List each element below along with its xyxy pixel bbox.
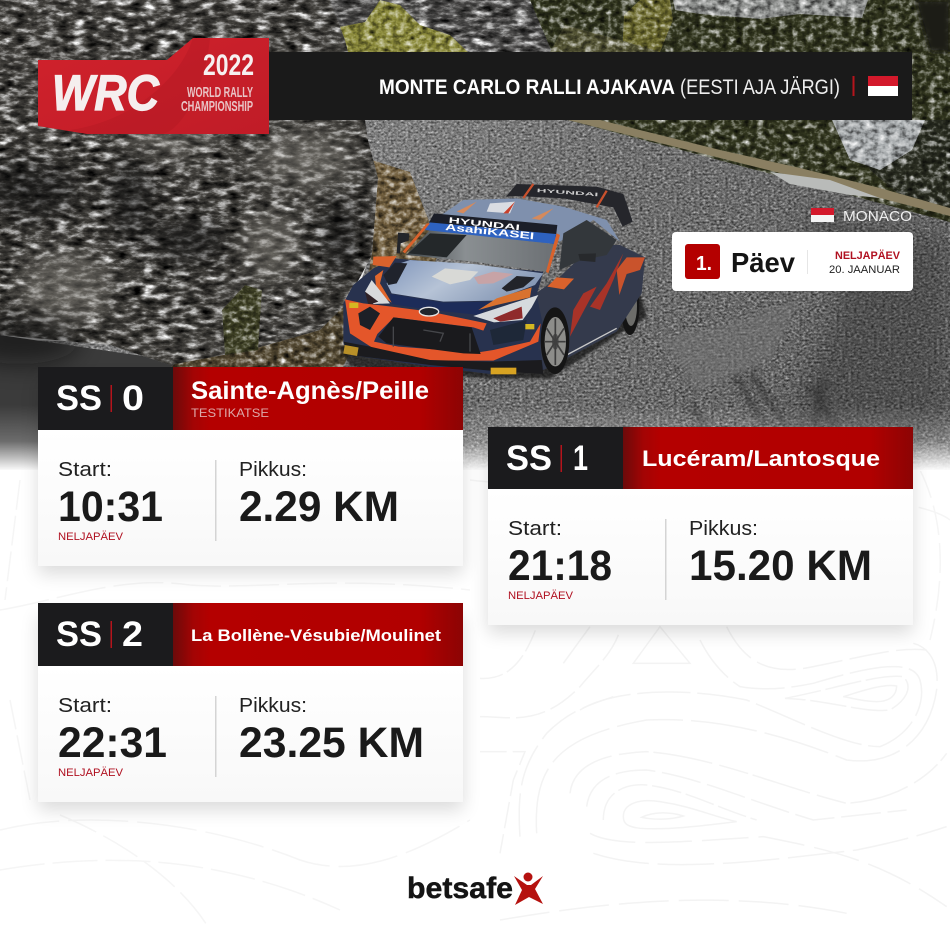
left bonnet vent — [383, 263, 407, 285]
icon: Monaco flag small — [811, 208, 834, 222]
rally car: AsahiKASEI — [445, 222, 535, 242]
photo: moss on rock — [222, 285, 262, 355]
roof — [433, 198, 620, 242]
weekday: NELJAPÄEV — [835, 249, 901, 262]
stage length: Pikkus: — [239, 459, 307, 481]
windscreen banner — [425, 213, 557, 244]
windscreen banner text: HYUNDAI — [448, 216, 520, 232]
stage number — [506, 439, 588, 478]
stage length: Pikkus: — [239, 695, 307, 717]
icon: Monaco flag — [868, 76, 898, 96]
photo: rock wall — [0, 0, 378, 365]
start time: NELJAPÄEV — [58, 531, 124, 543]
front body — [343, 258, 543, 374]
windscreen — [406, 230, 554, 272]
WRC logo: CHAMPIONSHIP — [181, 98, 253, 115]
photo: grass below rock — [170, 290, 352, 372]
stage number: SS — [56, 379, 102, 418]
start time — [508, 518, 612, 602]
background photo: mountain road — [0, 0, 950, 471]
stage number: 1 — [573, 439, 588, 478]
stage length: 23.25 KM — [239, 719, 424, 767]
photo: dark road right — [780, 210, 950, 440]
stage length: 15.20 KM — [689, 542, 872, 590]
stage number: 2 — [122, 615, 143, 654]
day badge — [672, 232, 913, 291]
logo year: 2022 — [203, 49, 254, 82]
logo shape — [38, 38, 269, 134]
photo: olive tree — [323, 0, 468, 56]
date: 20. JAANUAR — [829, 264, 900, 276]
bonnet vent — [502, 276, 535, 292]
stage length: 2.29 KM — [239, 483, 399, 531]
bonnet band — [390, 294, 493, 315]
start time — [58, 695, 167, 779]
icon: betsafe figure — [514, 872, 543, 905]
splitter — [343, 342, 543, 374]
stage name: Sainte-Agnès/Peille — [191, 377, 429, 405]
mirror left — [397, 233, 409, 253]
orange swoosh — [478, 287, 532, 310]
bonnet sticker — [432, 268, 478, 284]
day label: Päev — [731, 247, 795, 278]
location label — [811, 208, 912, 225]
stage length — [239, 459, 399, 531]
mirror right — [578, 253, 596, 262]
rear wing — [506, 184, 633, 227]
betsafe logo: betsafe — [407, 872, 513, 905]
stage number: SS — [506, 439, 552, 478]
start time: 22:31 — [58, 719, 167, 767]
stage number: SS — [56, 615, 102, 654]
front badge — [419, 307, 439, 316]
start time: Start: — [508, 518, 562, 540]
photo: forest backdrop — [300, 0, 950, 230]
photo: road light patch — [660, 300, 800, 390]
photo: scrub — [550, 25, 660, 52]
stage number — [56, 615, 143, 654]
wing text: HYUNDAI — [537, 188, 600, 198]
start time: Start: — [58, 695, 112, 717]
fog lights — [349, 303, 358, 308]
photo: dark rock upper middle — [300, 0, 552, 52]
photo: rock dark patches — [0, 158, 360, 364]
stage number — [56, 379, 144, 418]
day number — [685, 244, 720, 279]
photo: dark branch top right — [915, 0, 950, 52]
stage name: La Bollène-Vésubie/Moulinet — [191, 626, 441, 645]
photo: snowy cliff — [673, 0, 868, 19]
rear wheel — [621, 275, 639, 335]
logo subtitle: WORLD RALLY — [187, 84, 253, 101]
stage length: Pikkus: — [689, 518, 758, 540]
photo: roadside verge — [560, 118, 950, 216]
front wheel — [541, 307, 569, 374]
photo: road left dark — [0, 335, 360, 470]
title: MONTE CARLO RALLI AJAKAVA — [379, 76, 675, 99]
bonnet — [387, 260, 543, 302]
start time — [58, 459, 163, 543]
start time: NELJAPÄEV — [58, 767, 124, 779]
topographic background pattern — [480, 627, 947, 920]
photo: snow on verge — [770, 172, 880, 198]
panel: SS 1 — [488, 427, 913, 633]
stage number: 0 — [122, 379, 144, 418]
car shadow — [340, 293, 647, 378]
title suffix: (EESTI AJA JÄRGI) — [680, 76, 840, 99]
topographic pattern, left side — [0, 470, 950, 930]
stage length — [689, 518, 872, 590]
start time: Start: — [58, 459, 112, 481]
photo: white fade — [0, 405, 950, 471]
side window — [559, 220, 617, 270]
number plate — [491, 368, 516, 374]
start time: 21:18 — [508, 542, 612, 590]
stage length — [239, 695, 424, 767]
WRC wordmark: WRC — [52, 65, 160, 121]
photo: road — [0, 118, 950, 470]
panel: SS 2 — [38, 603, 463, 810]
start time: 10:31 — [58, 483, 163, 531]
title bar — [269, 52, 912, 120]
panel: SS 0 — [38, 367, 463, 574]
lower bumper — [345, 299, 541, 361]
photo: snow patch — [832, 120, 925, 170]
start time: NELJAPÄEV — [508, 590, 574, 602]
location label: MONACO — [843, 208, 912, 225]
photo: right trees — [850, 120, 950, 215]
rally car — [340, 184, 647, 378]
left side intake — [358, 307, 380, 330]
radiator grille — [378, 317, 481, 354]
day number: 1. — [696, 253, 712, 275]
photo: dry grass by rock — [365, 160, 440, 300]
right side intake — [490, 320, 527, 345]
photo: rock light patches — [20, 126, 355, 328]
car side body — [533, 245, 645, 370]
stage name: Lucéram/Lantosque — [642, 446, 880, 471]
tyre marks — [690, 372, 835, 425]
headlights — [473, 295, 538, 322]
stage note: TESTIKATSE — [191, 406, 269, 420]
photo: olive tree top right — [622, 0, 673, 52]
WRC logo — [38, 38, 269, 134]
